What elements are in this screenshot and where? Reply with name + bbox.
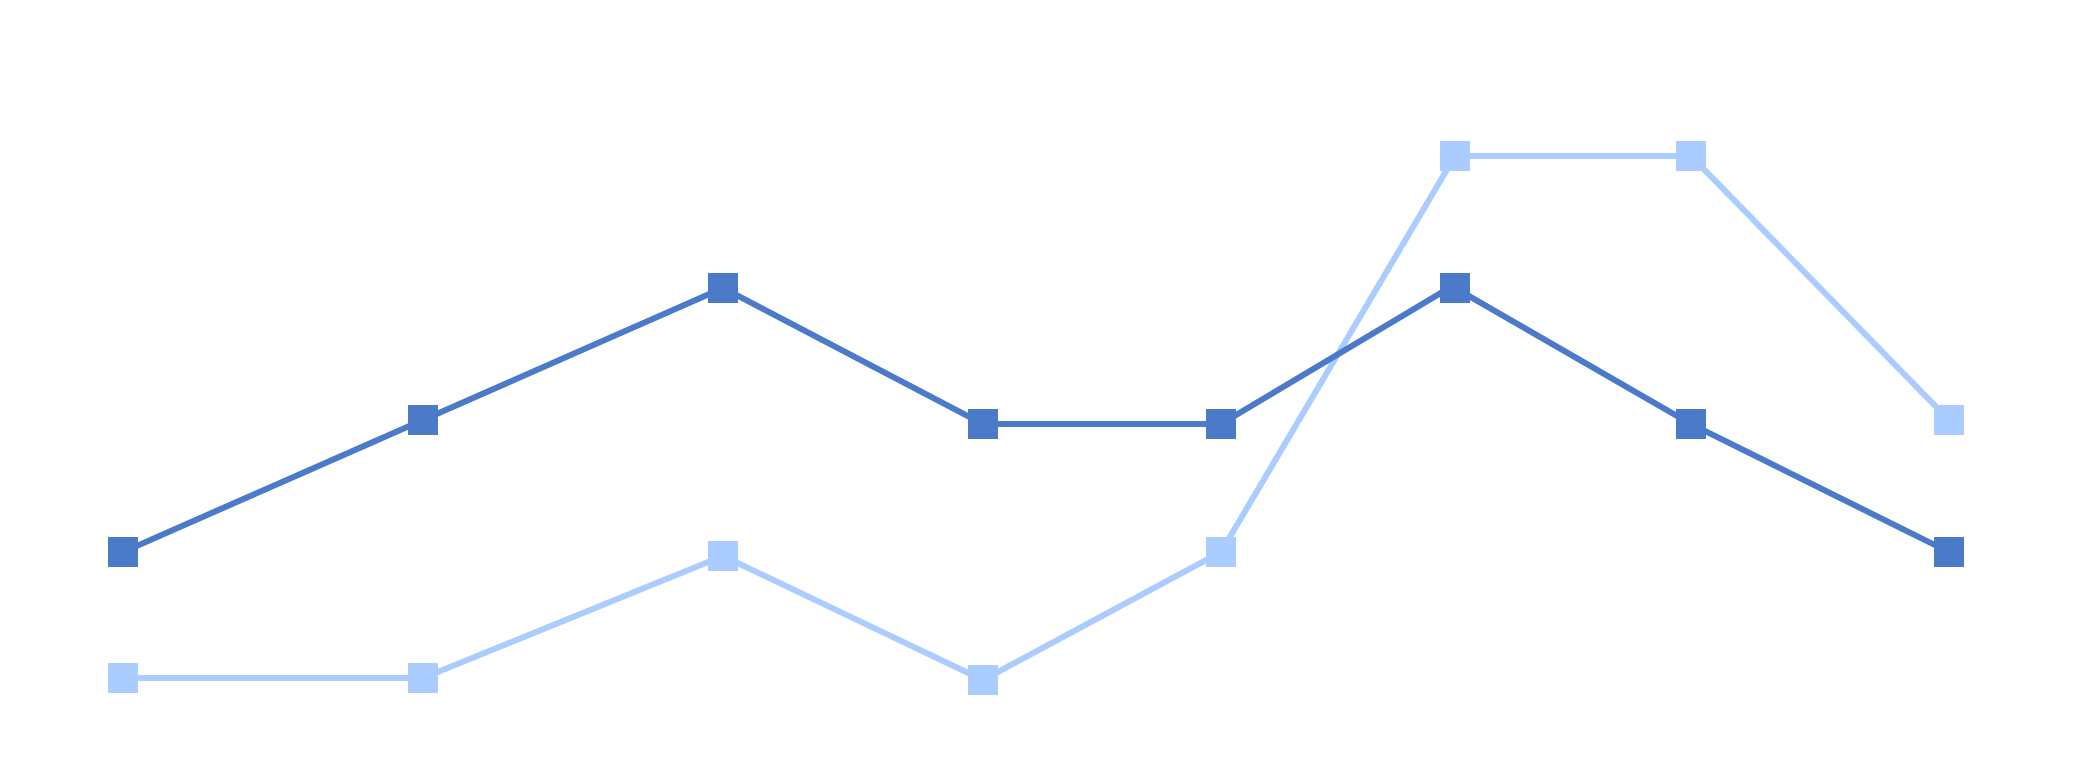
series: dark blue	[108, 273, 1964, 567]
series: light blue	[108, 141, 1964, 695]
